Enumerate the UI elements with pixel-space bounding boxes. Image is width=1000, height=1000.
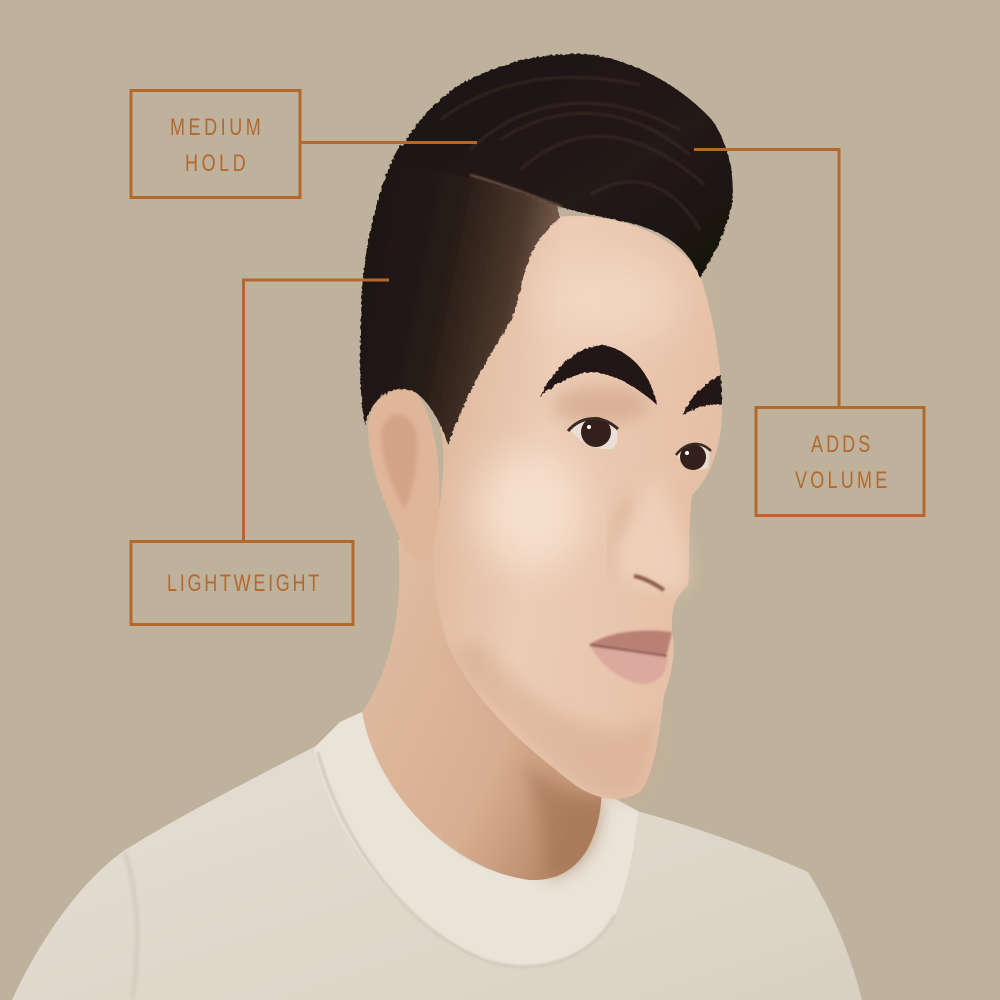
face (434, 216, 722, 799)
hair fade (360, 145, 560, 445)
callout: adds volume: VOLUME (795, 468, 887, 494)
neck (362, 520, 640, 880)
lips (590, 630, 672, 684)
cheek highlight (475, 450, 585, 570)
callout: medium hold (131, 90, 477, 198)
right eye (676, 444, 711, 470)
neck shadow under jaw (520, 760, 602, 878)
ear (368, 389, 439, 560)
callout: medium hold: MEDIUM (170, 115, 261, 141)
callout: adds volume (694, 150, 924, 516)
callout: adds volume: ADDS (811, 432, 870, 458)
left eyebrow (540, 345, 657, 405)
hair strands (440, 77, 705, 230)
left eye (568, 417, 618, 449)
callout: lightweight (131, 280, 389, 624)
hair quiff (395, 54, 733, 278)
forehead highlight (540, 255, 680, 345)
right eyebrow (683, 375, 722, 415)
shirt (12, 710, 862, 1000)
nose (614, 470, 688, 591)
parting line (470, 175, 562, 207)
callout: lightweight: LIGHTWEIGHT (167, 571, 319, 597)
jaw shadow (450, 640, 660, 799)
callout: medium hold: HOLD (185, 151, 246, 177)
eye socket shadow (552, 387, 648, 423)
